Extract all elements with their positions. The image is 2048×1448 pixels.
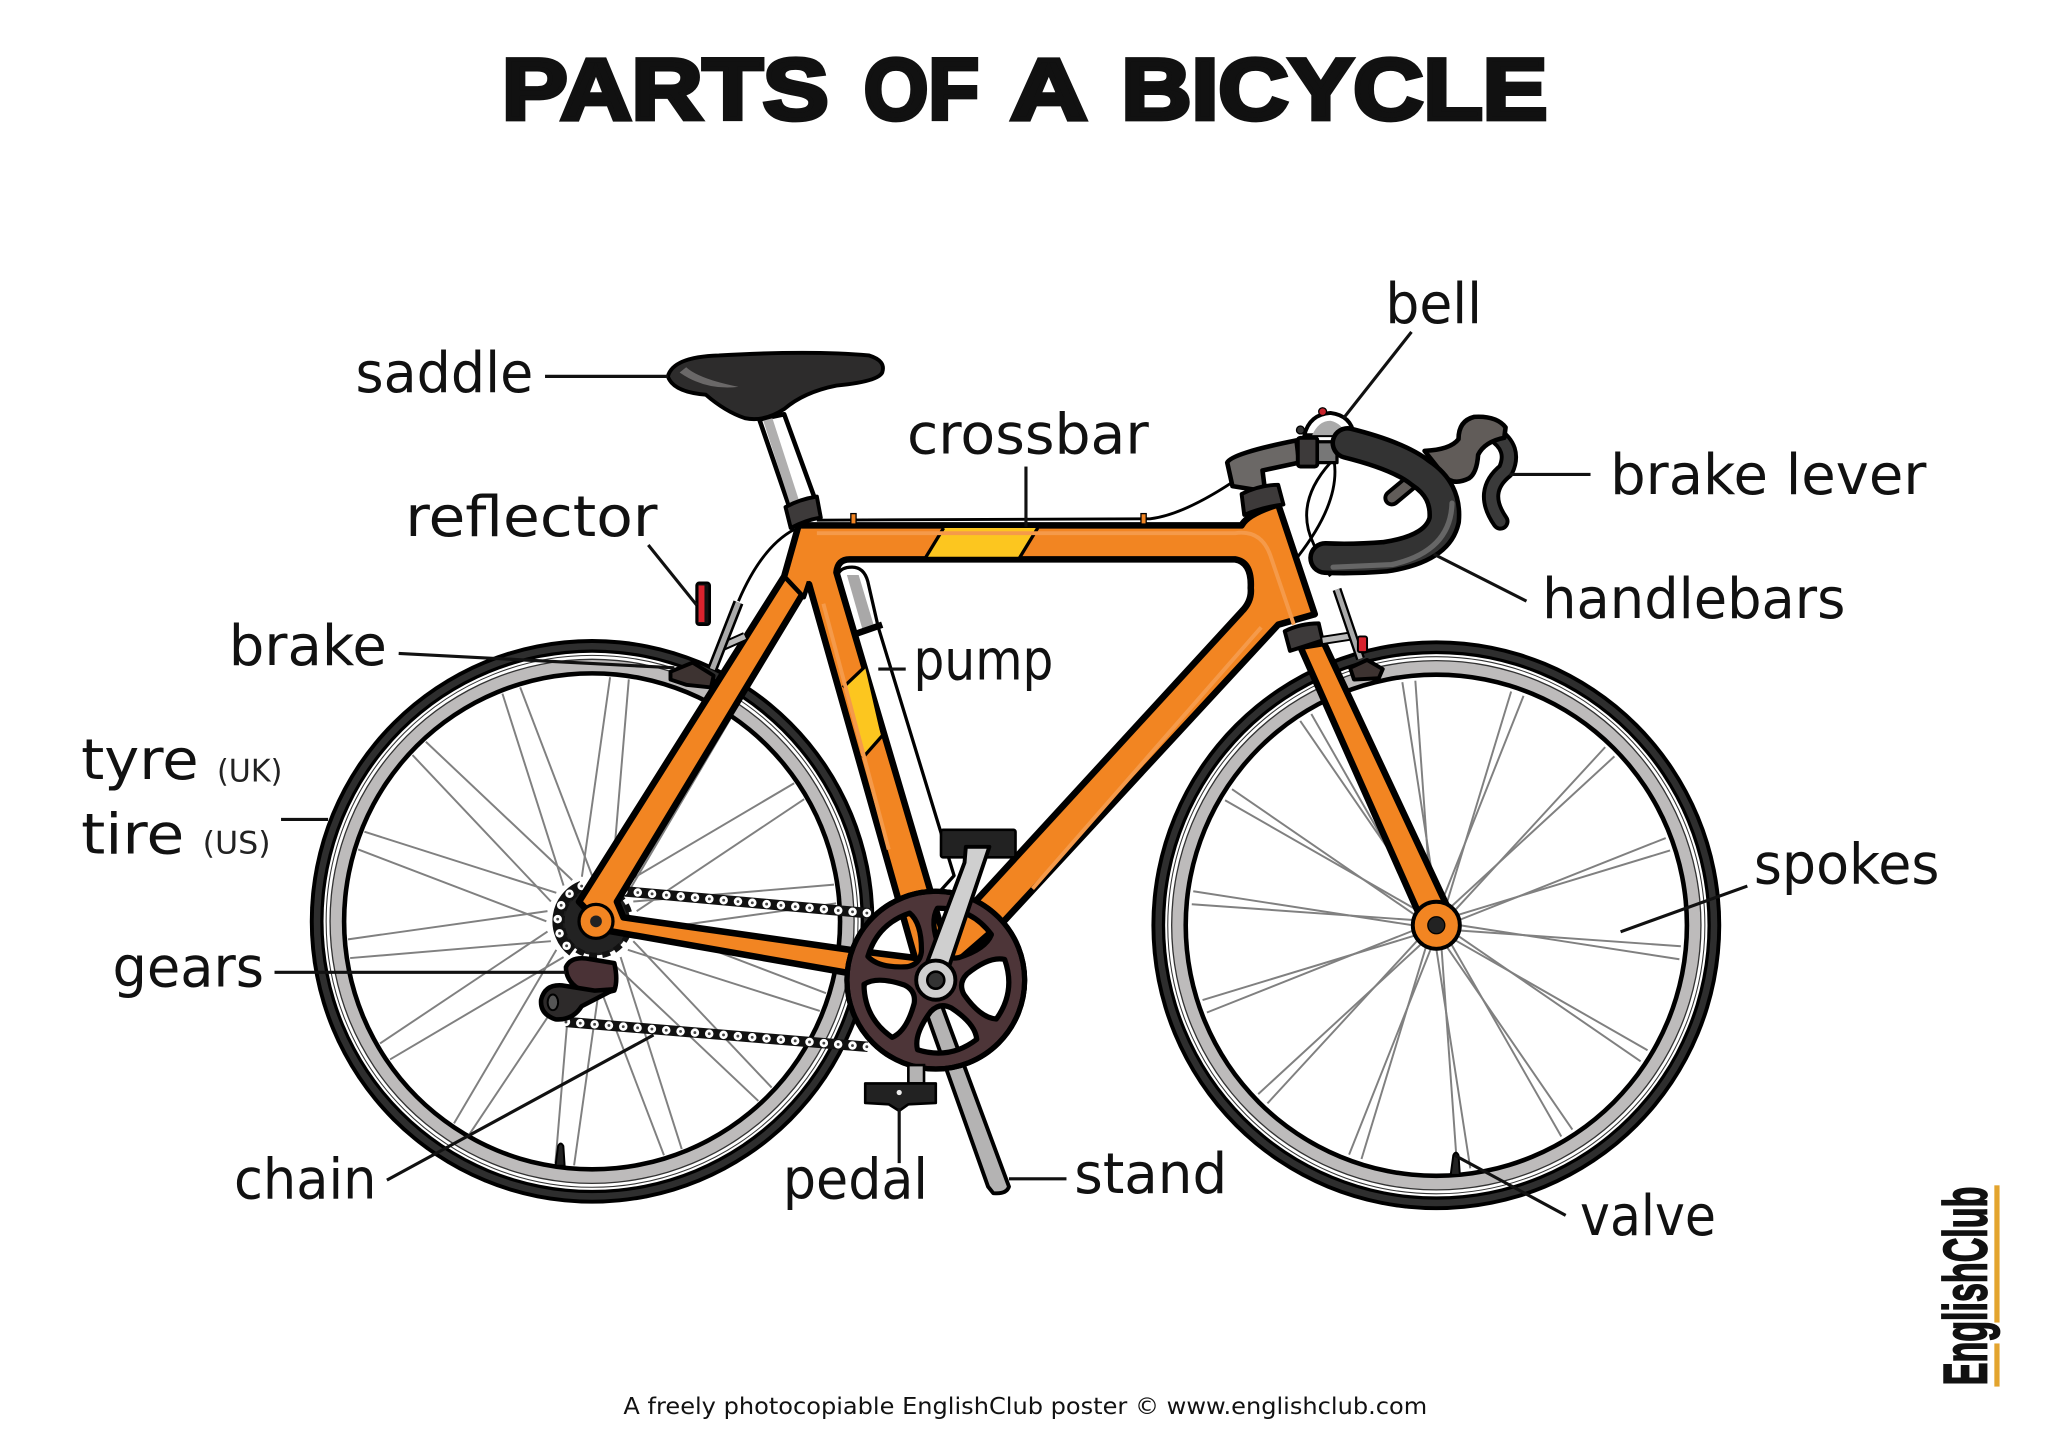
label: pedal: pedal	[783, 1147, 928, 1212]
label: brake: brake	[229, 614, 387, 679]
upper pedal	[916, 830, 1016, 1000]
front wheel	[1151, 640, 1721, 1210]
label: brake	[229, 614, 674, 679]
label: stand: stand	[1074, 1142, 1227, 1207]
label: tyre and tire: tire	[81, 802, 184, 867]
label: brake lever: brake lever	[1610, 443, 1927, 508]
dropout	[579, 904, 613, 938]
rear wheel	[310, 639, 874, 1204]
label: gears: gears	[112, 936, 264, 1001]
label: valve: valve	[1580, 1184, 1716, 1249]
icon: front valve	[1451, 1153, 1460, 1175]
brake hood	[1425, 417, 1506, 482]
rear derailleur	[541, 958, 616, 1019]
icon: rear reflector	[697, 583, 710, 625]
label: reflector: reflector	[405, 485, 658, 550]
logo: EnglishClub: EnglishClub	[1932, 1187, 2001, 1385]
icon: front reflector	[1358, 636, 1367, 652]
gears	[562, 887, 630, 955]
crossbar stripe	[925, 528, 1038, 558]
lower pedal	[865, 1065, 936, 1111]
stem	[1227, 438, 1337, 515]
label: bell: bell	[1385, 272, 1482, 337]
chain	[558, 886, 872, 1047]
label: spokes	[1621, 832, 1939, 932]
title: OF	[864, 42, 979, 138]
title	[502, 42, 1547, 138]
label: tyre and tire	[81, 728, 328, 867]
fork	[1300, 643, 1460, 949]
label: bell	[1344, 272, 1482, 418]
label: tyre and tire: tyre	[81, 728, 199, 793]
handlebars	[1325, 443, 1452, 567]
label: tyre and tire: (US)	[203, 825, 271, 861]
bell	[1296, 408, 1354, 435]
crank arm	[916, 847, 989, 1000]
stand	[924, 1000, 1009, 1193]
fork collar	[1285, 623, 1323, 651]
seat post	[759, 414, 821, 528]
label: chain: chain	[234, 1147, 376, 1212]
chainring	[847, 891, 1025, 1069]
front brake	[1323, 589, 1383, 680]
title: A	[1010, 42, 1087, 138]
label: tyre and tire: (UK)	[217, 754, 282, 790]
label: chain	[234, 1035, 654, 1212]
top cable	[738, 482, 1232, 601]
title: PARTS	[502, 42, 829, 138]
frame	[579, 504, 1315, 980]
label: pump: pump	[914, 629, 1053, 694]
front hub	[1413, 902, 1460, 949]
title: BICYCLE	[1121, 42, 1547, 138]
label: crossbar: crossbar	[907, 402, 1150, 467]
head cables	[1298, 463, 1335, 576]
logo: EnglishClub	[1932, 1185, 2001, 1387]
pump	[838, 567, 954, 902]
lug notch	[784, 576, 809, 597]
icon: rear valve	[555, 1144, 565, 1166]
brake lever	[1392, 417, 1509, 521]
seat tube stripe	[843, 665, 882, 758]
label: saddle: saddle	[356, 341, 533, 406]
label: handlebars	[1434, 554, 1845, 632]
label: handlebars: handlebars	[1542, 567, 1845, 632]
label: valve	[1455, 1155, 1716, 1249]
saddle	[668, 353, 883, 419]
footer: A freely photocopiable EnglishClub poster © www.englishclub.com	[623, 1392, 1427, 1420]
label: reflector	[405, 485, 697, 605]
label: spokes: spokes	[1754, 832, 1939, 897]
rear brake	[670, 583, 745, 687]
